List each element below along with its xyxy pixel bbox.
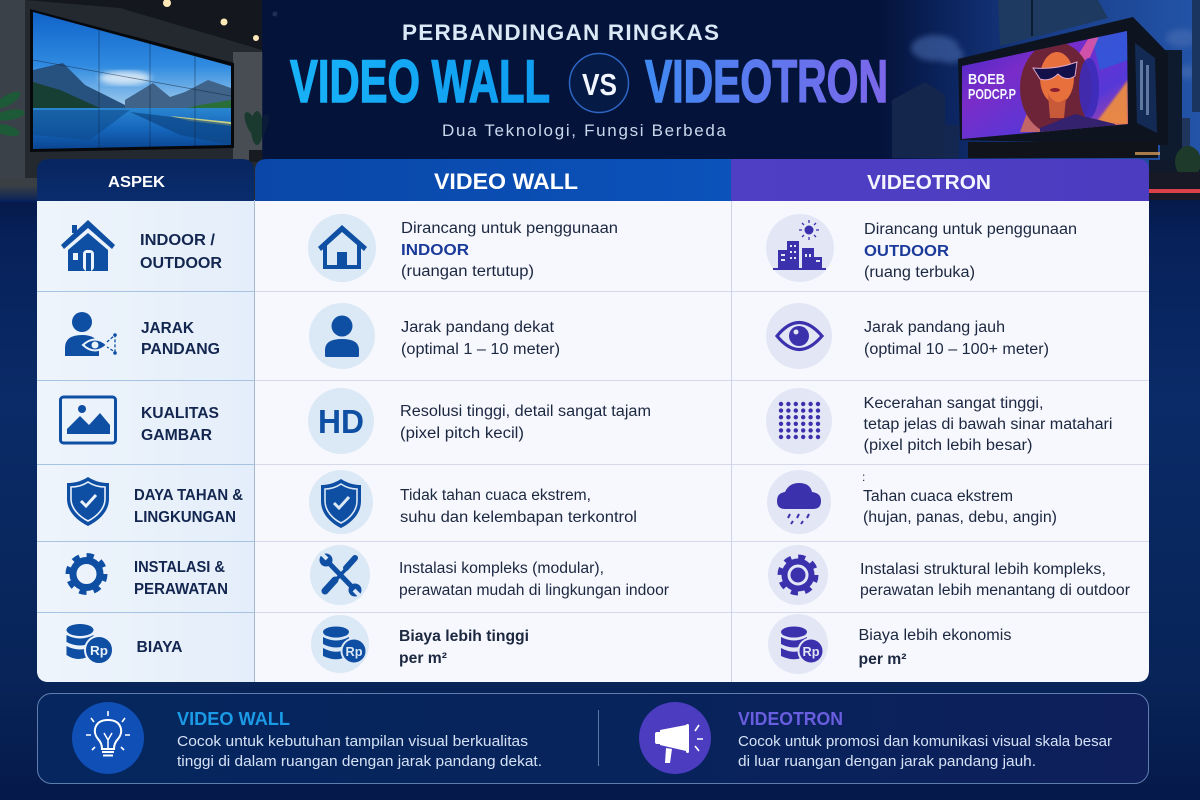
text: videotron kualitas: (pixel pitch lebih besar) (864, 437, 1032, 454)
billboard ad text: BOEB (968, 71, 1005, 88)
row: biaya (66, 614, 1012, 674)
icon: videotron pixel grid (766, 388, 832, 454)
text: videotron instalasi (860, 561, 1130, 599)
label: indoor outdoor: OUTDOOR (140, 255, 222, 272)
icon: videotron city sun (766, 214, 834, 282)
text: video wall indoor (401, 220, 618, 280)
text: video wall instalasi: perawatan mudah di lingkungan indoor (399, 582, 669, 599)
header: videotron: VIDEOTRON (867, 172, 991, 194)
text: video wall summary: VIDEO WALL (177, 709, 290, 729)
text: videotron daya tahan (862, 470, 1057, 526)
icon: video wall person (309, 303, 375, 369)
text: video wall daya tahan (400, 487, 637, 526)
text: video wall summary: tinggi di dalam ruangan dengan jarak pandang dekat. (177, 753, 542, 770)
text: video wall summary (177, 709, 542, 770)
text: video wall summary: Cocok untuk kebutuhan tampilan visual berkualitas (177, 733, 528, 750)
label: jarak pandang: PANDANG (141, 341, 220, 358)
text: videotron outdoor: (ruang terbuka) (864, 264, 975, 281)
text: videotron daya tahan: (hujan, panas, debu, angin) (863, 509, 1057, 526)
text: videotron biaya (858, 627, 1012, 668)
text: videotron biaya: per m² (858, 651, 906, 668)
label: instalasi (134, 559, 228, 598)
text: video wall kualitas (400, 403, 651, 442)
text: video wall daya tahan: Tidak tahan cuaca ekstrem, (400, 487, 591, 504)
title: perbandingan ringkas: PERBANDINGAN RINGKAS (402, 20, 719, 45)
comparison table (37, 159, 1149, 682)
label: jarak pandang (141, 320, 220, 358)
header: aspek (37, 159, 254, 201)
text: videotron instalasi: Instalasi struktural lebih kompleks, (860, 561, 1106, 578)
text: videotron jarak (864, 319, 1049, 358)
text: videotron outdoor: OUTDOOR (864, 243, 949, 260)
heading block (290, 20, 888, 140)
text: video wall indoor: INDOOR (401, 242, 469, 259)
header: video wall: VIDEO WALL (434, 169, 578, 194)
icon: video wall home (308, 214, 376, 282)
text: videotron biaya: Biaya lebih ekonomis (858, 627, 1012, 644)
billboard ad text (968, 71, 1016, 103)
label: indoor outdoor: INDOOR / (140, 232, 216, 249)
text: videotron summary: di luar ruangan dengan jarak pandang jauh. (738, 753, 1036, 770)
text: videotron kualitas: Kecerahan sangat tinggi, (864, 395, 1044, 412)
text: videotron outdoor: Dirancang untuk penggunaan (864, 221, 1077, 238)
text: videotron daya tahan: : (862, 470, 865, 484)
subtitle: Dua Teknologi, Fungsi Berbeda (442, 121, 727, 140)
icon: video wall coins: Rp (346, 645, 363, 659)
text: video wall biaya: Biaya lebih tinggi (399, 628, 529, 645)
text: video wall indoor: Dirancang untuk penggunaan (401, 220, 618, 237)
icon: aspect gear (68, 556, 105, 592)
badge: vs: VS (582, 67, 617, 102)
icon: aspect picture (60, 397, 116, 443)
text: videotron kualitas: tetap jelas di bawah sinar matahari (864, 416, 1112, 433)
text: video wall biaya (399, 628, 529, 667)
icon: videotron gear (768, 545, 828, 605)
text: videotron instalasi: perawatan lebih menantang di outdoor (860, 582, 1130, 599)
label: daya tahan: LINGKUNGAN (134, 509, 236, 526)
icon: aspect coins (66, 624, 113, 664)
text: video wall indoor: (ruangan tertutup) (401, 263, 534, 280)
panel: summary (38, 694, 1148, 784)
photo: indoor video wall (0, 0, 292, 202)
text: video wall kualitas: (pixel pitch kecil) (400, 425, 524, 442)
icon: video wall hd: HD (318, 403, 364, 440)
icon: videotron coins (768, 614, 828, 674)
text: videotron kualitas (864, 395, 1112, 454)
icon: videotron coins: Rp (802, 645, 820, 659)
text: video wall jarak: (optimal 1 – 10 meter) (401, 341, 560, 358)
icon: video wall shield (309, 470, 373, 534)
row: daya tahan (67, 470, 1057, 534)
label: instalasi: PERAWATAN (134, 581, 228, 598)
text: video wall daya tahan: suhu dan kelembapan terkontrol (400, 509, 637, 526)
row: kualitas gambar (60, 388, 1112, 454)
header: video wall (255, 159, 731, 201)
text: videotron summary: Cocok untuk promosi dan komunikasi visual skala besar (738, 733, 1112, 750)
icon: videotron eye (766, 303, 832, 369)
header: videotron (731, 159, 1149, 201)
title: video wall: VIDEO WALL (290, 48, 550, 115)
icon: light bulb (72, 702, 144, 774)
text: video wall instalasi (399, 560, 669, 599)
label: biaya: BIAYA (136, 639, 182, 656)
icon: video wall tools (310, 545, 370, 605)
title: videotron: VIDEOTRON (645, 48, 888, 115)
text: video wall jarak (401, 319, 560, 358)
label: daya tahan: DAYA TAHAN & (134, 487, 243, 504)
row: jarak pandang (65, 303, 1049, 369)
icon: aspect coins: Rp (90, 643, 108, 658)
text: videotron daya tahan: Tahan cuaca ekstrem (863, 488, 1013, 505)
text: video wall instalasi: Instalasi kompleks (modular), (399, 560, 604, 577)
label: kualitas gambar: GAMBAR (141, 427, 212, 444)
row: indoor outdoor (61, 214, 1077, 282)
icon: aspect house (61, 220, 115, 271)
icon: aspect viewer with eye (65, 312, 117, 356)
icon: aspect shield (67, 477, 109, 526)
icon: video wall hd (308, 388, 374, 454)
text: video wall kualitas: Resolusi tinggi, detail sangat tajam (400, 403, 651, 420)
icon: video wall coins (311, 615, 369, 673)
text: videotron outdoor (864, 221, 1077, 281)
row: instalasi (68, 545, 1130, 605)
icon: videotron rain cloud (767, 470, 831, 534)
label: jarak pandang: JARAK (141, 320, 195, 337)
label: instalasi: INSTALASI & (134, 559, 225, 576)
text: video wall jarak: Jarak pandang dekat (401, 319, 555, 336)
label: daya tahan (134, 487, 243, 526)
text: videotron jarak: (optimal 10 – 100+ meter) (864, 341, 1049, 358)
billboard ad text: PODCP.P (968, 86, 1016, 103)
text: videotron summary: VIDEOTRON (738, 709, 843, 729)
header: aspek: ASPEK (108, 174, 165, 191)
photo: outdoor videotron billboard (880, 0, 1200, 200)
label: kualitas gambar: KUALITAS (141, 405, 219, 422)
text: videotron summary (738, 709, 1112, 770)
icon: megaphone (639, 702, 711, 774)
text: video wall biaya: per m² (399, 650, 447, 667)
badge: vs (570, 54, 628, 112)
label: indoor outdoor (140, 232, 222, 272)
label: kualitas gambar (141, 405, 219, 444)
text: videotron jarak: Jarak pandang jauh (864, 319, 1005, 336)
